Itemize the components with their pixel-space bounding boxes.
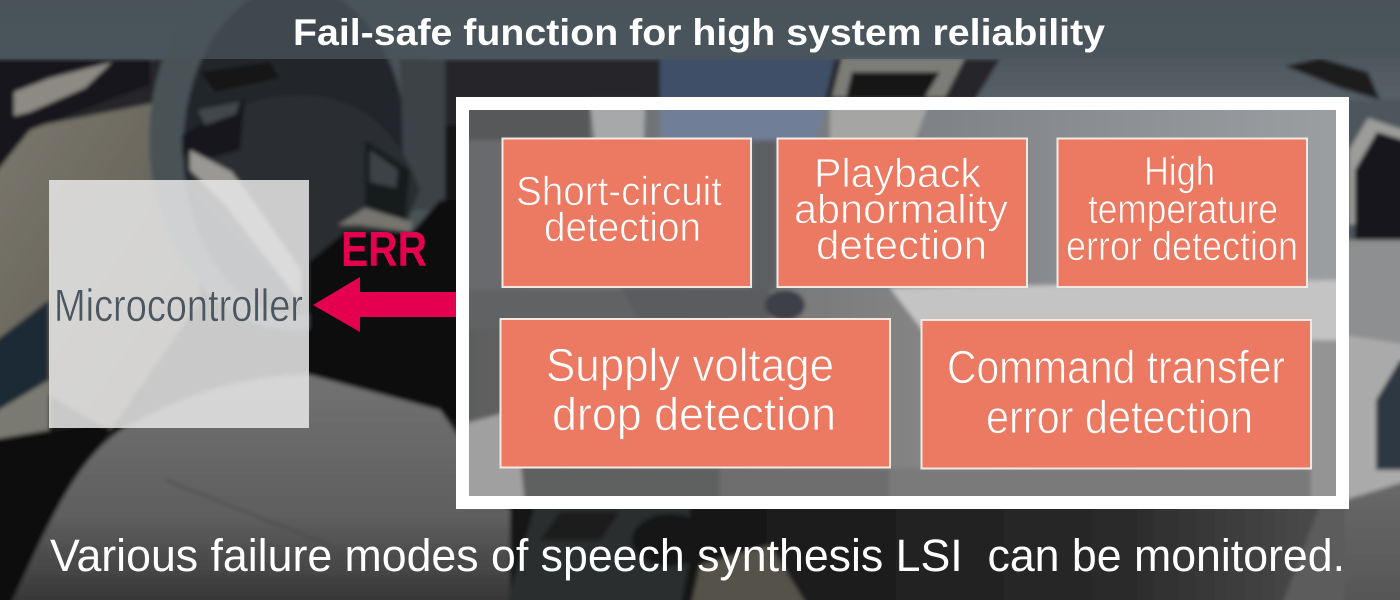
panel: microcontroller <box>49 180 309 428</box>
seat stitching <box>165 480 330 545</box>
bottom caption: Various failure modes of speech synthesis LSI can be monitored. <box>50 530 1345 581</box>
under-wheel shadow <box>309 200 456 420</box>
dark upper dash band <box>0 59 1000 150</box>
dashboard top <box>0 0 1400 120</box>
right silver spoke <box>338 208 412 232</box>
steering wheel rim <box>149 0 441 330</box>
steering wheel right rim darken <box>400 59 445 210</box>
panel: detection functions frame <box>456 97 1349 509</box>
right spoke switches <box>365 140 410 225</box>
box: short-circuit detection <box>502 138 751 287</box>
box: short-circuit detection: detection <box>544 204 701 250</box>
box: command transfer error detection: Command transfer <box>947 341 1285 393</box>
box: supply voltage drop detection <box>500 319 890 468</box>
label: Microcontroller: Microcontroller <box>54 280 303 331</box>
right side vent <box>1349 118 1400 225</box>
title banner <box>0 0 1400 59</box>
steering wheel hub <box>190 95 420 300</box>
box: playback abnormality detection: detection <box>816 222 987 268</box>
stalk switches <box>200 62 280 92</box>
box: playback abnormality detection <box>778 138 1027 287</box>
box: short-circuit detection: Short-circuit <box>516 168 723 214</box>
box: playback abnormality detection: Playback <box>814 150 981 196</box>
right side panel <box>1345 240 1400 600</box>
box: supply voltage drop detection: drop detection <box>552 388 836 440</box>
right side upper <box>1345 100 1400 250</box>
arrow: error signal to microcontroller <box>313 277 456 332</box>
frame interior photo <box>460 100 1345 505</box>
dash right vent <box>1285 58 1380 100</box>
box: command transfer error detection: error detection <box>986 391 1253 443</box>
left spoke switches <box>182 98 245 160</box>
label: ERR: ERR <box>341 223 427 277</box>
driver seat <box>8 375 510 600</box>
door panel <box>0 100 200 430</box>
center console <box>505 505 700 600</box>
title: Fail-safe function for high system reliability <box>293 12 1105 53</box>
box: command transfer error detection <box>922 320 1311 468</box>
lower door black <box>0 425 110 600</box>
door handle recess <box>0 59 150 180</box>
door lower dark trim <box>0 300 49 425</box>
steering wheel inner dash shadow <box>183 0 407 315</box>
box: high temperature error detection: error detection <box>1066 223 1298 269</box>
box: high temperature error detection: temperature <box>1088 186 1278 232</box>
white frame <box>456 97 1349 509</box>
left silver spoke <box>190 150 300 300</box>
box: supply voltage drop detection: Supply voltage <box>546 339 834 391</box>
center display <box>660 58 835 100</box>
box: playback abnormality detection: abnormality <box>794 186 1008 232</box>
passenger footwell <box>690 505 1400 600</box>
box: high temperature error detection <box>1058 138 1307 287</box>
center vent <box>832 58 965 97</box>
box: high temperature error detection: High <box>1144 148 1215 194</box>
